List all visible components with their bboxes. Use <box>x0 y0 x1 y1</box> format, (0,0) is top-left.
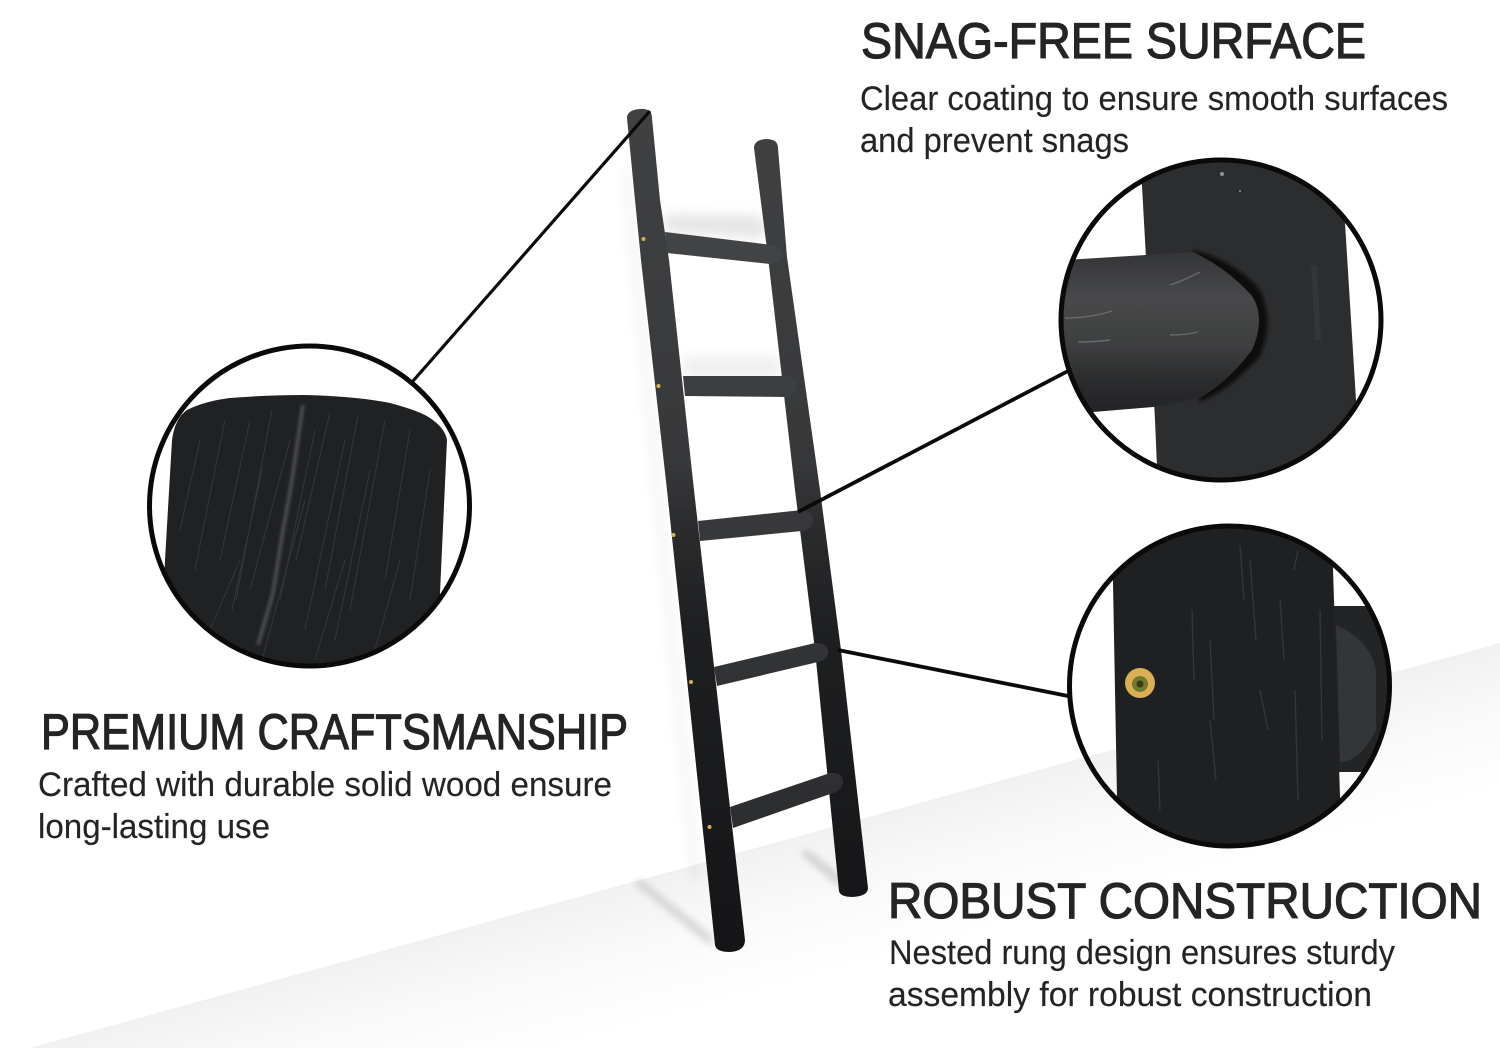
rung behind post <box>1334 606 1387 772</box>
feature: snag-free surface <box>860 13 1457 160</box>
rung <box>1050 252 1259 412</box>
bright grain streak <box>258 405 303 645</box>
rung 4 <box>714 643 828 686</box>
rung 2 <box>683 376 797 397</box>
rung highlights <box>1065 272 1200 342</box>
post <box>1140 150 1360 490</box>
feature: robust construction <box>888 873 1482 1014</box>
rung 1 <box>665 232 783 264</box>
post grain <box>1158 545 1322 810</box>
wood grain <box>180 410 430 660</box>
brass bolt <box>1125 668 1155 698</box>
detail circle: rung joint <box>1050 150 1381 490</box>
description: assembly for robust construction <box>888 976 1372 1014</box>
brass screws <box>642 237 712 829</box>
rung 3 <box>698 510 813 541</box>
post <box>1112 520 1342 850</box>
ladder shadows <box>622 170 840 948</box>
joint recess <box>1193 250 1267 402</box>
bolt socket <box>1132 676 1148 692</box>
rung 5 <box>730 773 843 828</box>
circle outline <box>150 346 470 666</box>
wood post end <box>160 395 447 680</box>
description: and prevent snags <box>860 122 1129 160</box>
surface specks <box>1220 172 1241 192</box>
left rail <box>627 109 745 952</box>
description: Crafted with durable solid wood ensure <box>38 766 612 804</box>
detail circle: wood end <box>150 346 470 680</box>
circle outline <box>1061 160 1381 480</box>
heading: PREMIUM CRAFTSMANSHIP <box>41 704 628 760</box>
heading: SNAG-FREE SURFACE <box>861 13 1366 69</box>
heading: ROBUST CONSTRUCTION <box>888 873 1482 929</box>
ladder <box>627 109 868 952</box>
right rail <box>754 139 868 897</box>
detail circle: nested rung construction <box>1070 520 1400 850</box>
circle outline <box>1070 526 1390 846</box>
feature: premium craftsmanship <box>38 704 628 846</box>
leader line: top of ladder to wood detail <box>413 111 650 381</box>
description: Nested rung design ensures sturdy <box>889 934 1395 972</box>
leader line: rail to construction detail <box>838 650 1068 696</box>
leader line: rung to surface detail <box>798 371 1068 512</box>
description: long-lasting use <box>38 808 270 846</box>
description: Clear coating to ensure smooth surfaces <box>860 80 1448 118</box>
floor background <box>30 643 1500 1048</box>
